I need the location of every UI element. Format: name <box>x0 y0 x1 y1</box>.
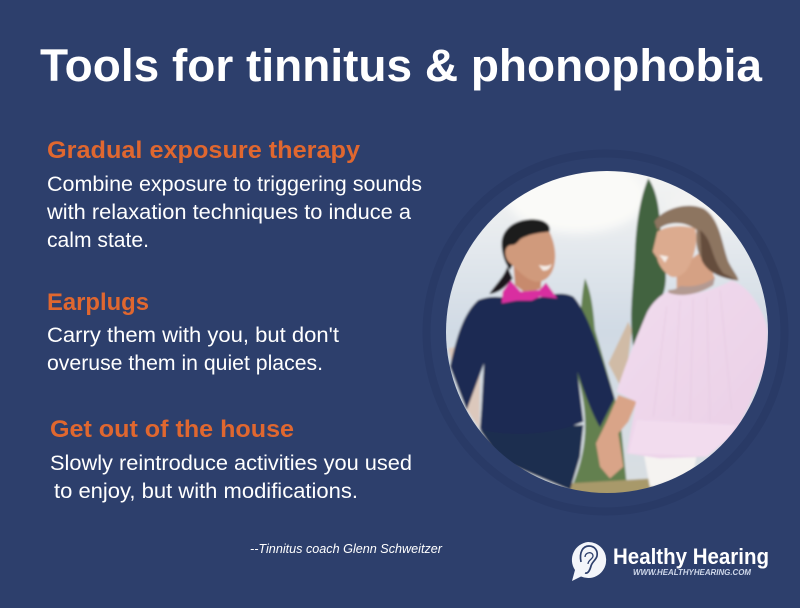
body text: gradual exposure therapy: calm state. <box>47 229 149 252</box>
blouse ruffle hem <box>672 424 734 456</box>
infographic canvas <box>40 48 768 581</box>
woman left: navy sweater <box>450 294 615 434</box>
ground <box>568 478 654 493</box>
body text: gradual exposure therapy <box>46 173 422 252</box>
woman right: pink blouse <box>617 281 768 458</box>
heading: get out of the house: Get out of the house <box>50 416 294 443</box>
body text: earplugs: Carry them with you, but don't <box>47 324 339 347</box>
attribution: --Tinnitus coach Glenn Schweitzer <box>250 541 443 556</box>
logo wordmark: Healthy Hearing <box>613 544 769 569</box>
woman right: hair back <box>654 206 738 281</box>
circular photo: two women walking hand in hand <box>440 160 773 498</box>
body text: earplugs: overuse them in quiet places. <box>47 352 323 375</box>
logo: Healthy Hearing <box>572 542 769 581</box>
woman right: pearl necklace <box>668 277 715 295</box>
woman left: smile <box>539 264 552 271</box>
heading: earplugs: Earplugs <box>47 289 149 316</box>
woman left: face <box>505 232 555 282</box>
body text: get out of the house <box>50 452 412 503</box>
woman left: ponytail <box>489 267 513 294</box>
woman left: neck <box>513 263 542 294</box>
body text: gradual exposure therapy: Combine exposure to triggering sounds <box>47 173 422 196</box>
section: earplugs <box>47 289 339 375</box>
icon: speech bubble with ear <box>572 542 606 581</box>
logo url: WWW.HEALTHYHEARING.COM <box>633 568 751 577</box>
blouse pleats <box>653 290 732 422</box>
woman left: jeans <box>480 425 583 490</box>
title: Tools for tinnitus & phonophobia <box>40 40 763 91</box>
clouds <box>510 184 642 234</box>
woman left: hair back <box>502 219 550 270</box>
body text: get out of the house: Slowly reintroduce activities you used <box>50 452 412 475</box>
woman right: mouth <box>659 255 668 263</box>
body text: gradual exposure therapy: with relaxation techniques to induce a <box>46 201 411 224</box>
woman right: white trousers <box>644 455 697 487</box>
woman right: face <box>653 226 696 277</box>
woman right: neck <box>677 250 715 290</box>
building <box>608 322 632 393</box>
small cypress tree <box>573 278 627 483</box>
body text: get out of the house: to enjoy, but with modifications. <box>54 480 358 503</box>
section: get out of the house <box>50 416 412 503</box>
body text: earplugs <box>47 324 339 375</box>
heading: gradual exposure therapy: Gradual exposure therapy <box>47 137 361 164</box>
woman right: arm and hand <box>596 395 637 478</box>
woman left: pink collar <box>502 281 557 303</box>
tall cypress tree <box>631 178 666 347</box>
section: gradual exposure therapy <box>46 137 422 252</box>
photo ring <box>422 150 788 516</box>
